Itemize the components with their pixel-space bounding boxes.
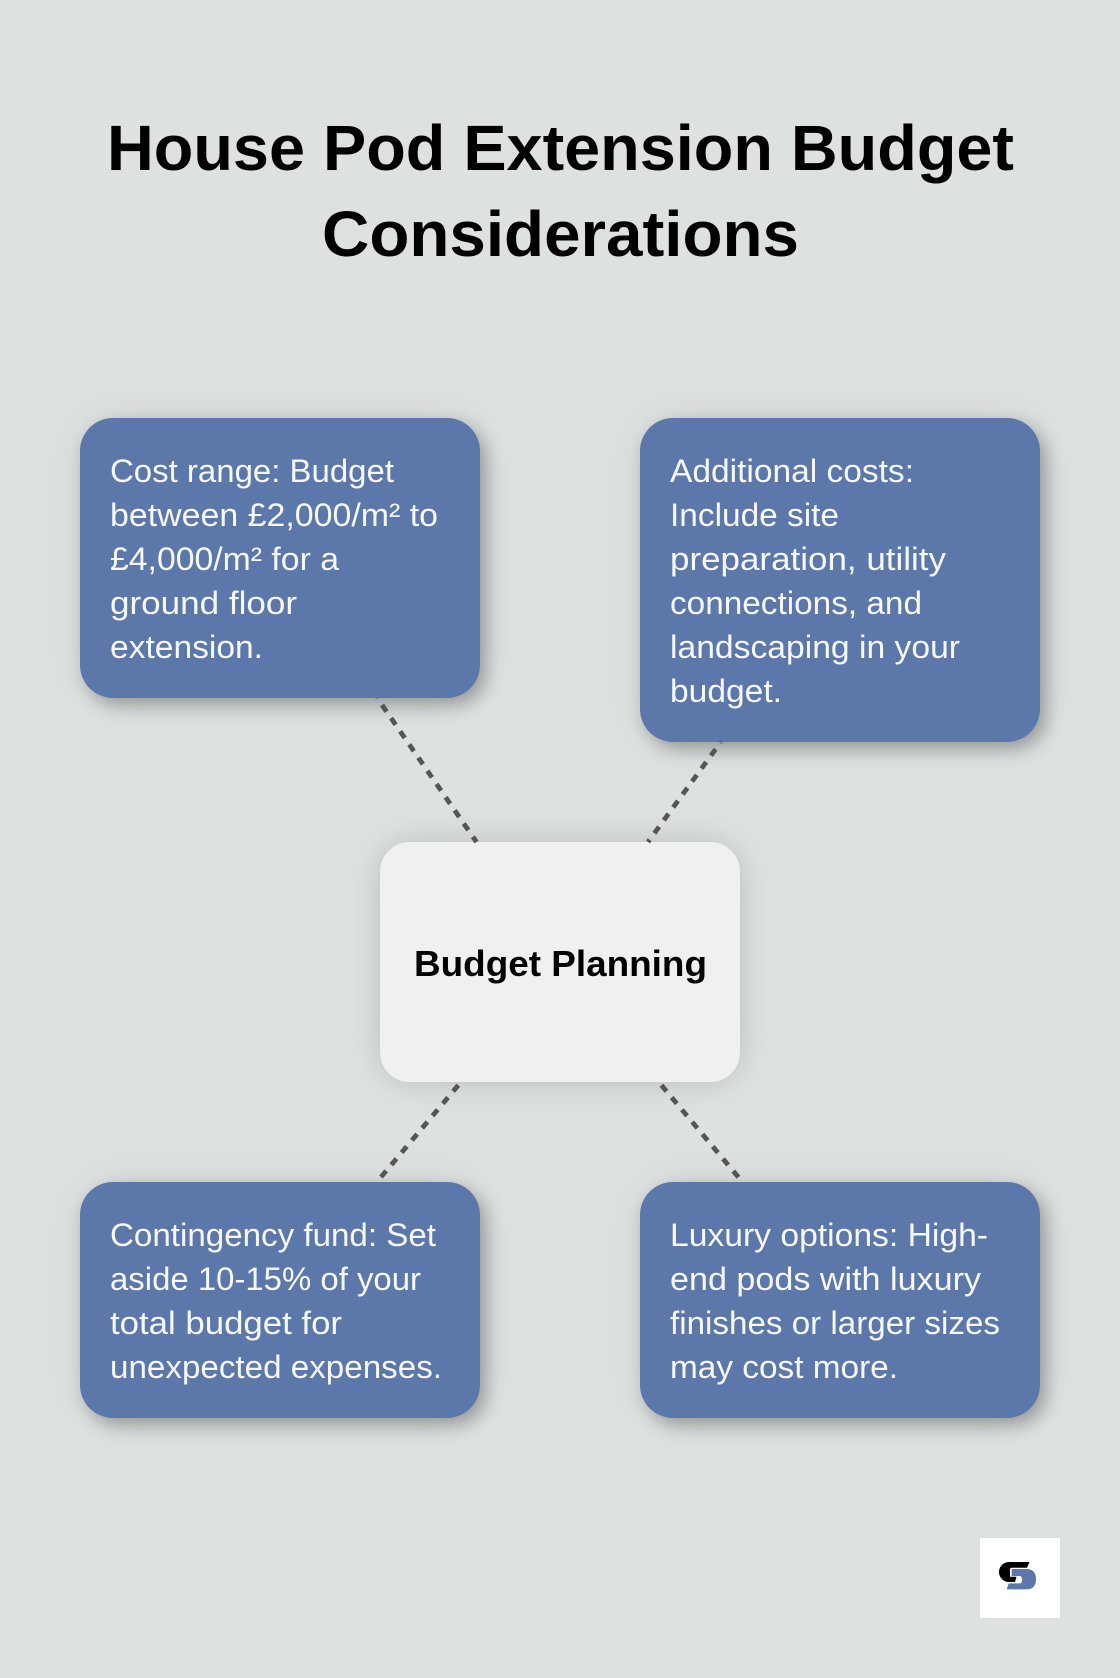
title: Considerations <box>322 198 799 270</box>
panel: luxury options: Luxury options: High- <box>670 1217 988 1253</box>
panel: contingency fund: unexpected expenses. <box>110 1349 442 1385</box>
panel: cost range: ground floor <box>110 585 297 621</box>
connector: cost range to centre <box>377 698 476 842</box>
panel: cost range: £4,000/m² for a <box>110 541 339 577</box>
connector: contingency fund to centre <box>381 1085 458 1177</box>
panel: luxury options <box>640 1182 1040 1418</box>
panel: additional costs: preparation, utility <box>670 541 946 577</box>
title <box>107 112 1014 270</box>
connector: luxury options to centre <box>661 1085 739 1177</box>
panel: contingency fund <box>80 1182 480 1418</box>
panel: additional costs: connections, and <box>670 585 922 621</box>
panel: luxury options: end pods with luxury <box>670 1261 981 1297</box>
panel: additional costs: Additional costs: <box>670 453 914 489</box>
panel: budget planning centre <box>380 842 740 1082</box>
title: House Pod Extension Budget <box>107 112 1014 184</box>
panel: additional costs <box>640 418 1040 742</box>
panel: cost range: Cost range: Budget <box>110 453 394 489</box>
icon: logo <box>980 1538 1060 1618</box>
panel: budget planning centre: Budget Planning <box>414 943 707 984</box>
connector: additional costs to centre <box>648 742 721 842</box>
panel: cost range: extension. <box>110 629 263 665</box>
panel: contingency fund: total budget for <box>110 1305 342 1341</box>
panel: cost range <box>80 418 480 698</box>
panel: additional costs: Include site <box>670 497 839 533</box>
panel: luxury options: may cost more. <box>670 1349 898 1385</box>
panel: additional costs: budget. <box>670 673 782 709</box>
panel: contingency fund: Contingency fund: Set <box>110 1217 436 1253</box>
panel: cost range: between £2,000/m² to <box>110 497 438 533</box>
panel: contingency fund: aside 10-15% of your <box>110 1261 421 1297</box>
panel: luxury options: finishes or larger sizes <box>670 1305 1000 1341</box>
panel: additional costs: landscaping in your <box>670 629 960 665</box>
